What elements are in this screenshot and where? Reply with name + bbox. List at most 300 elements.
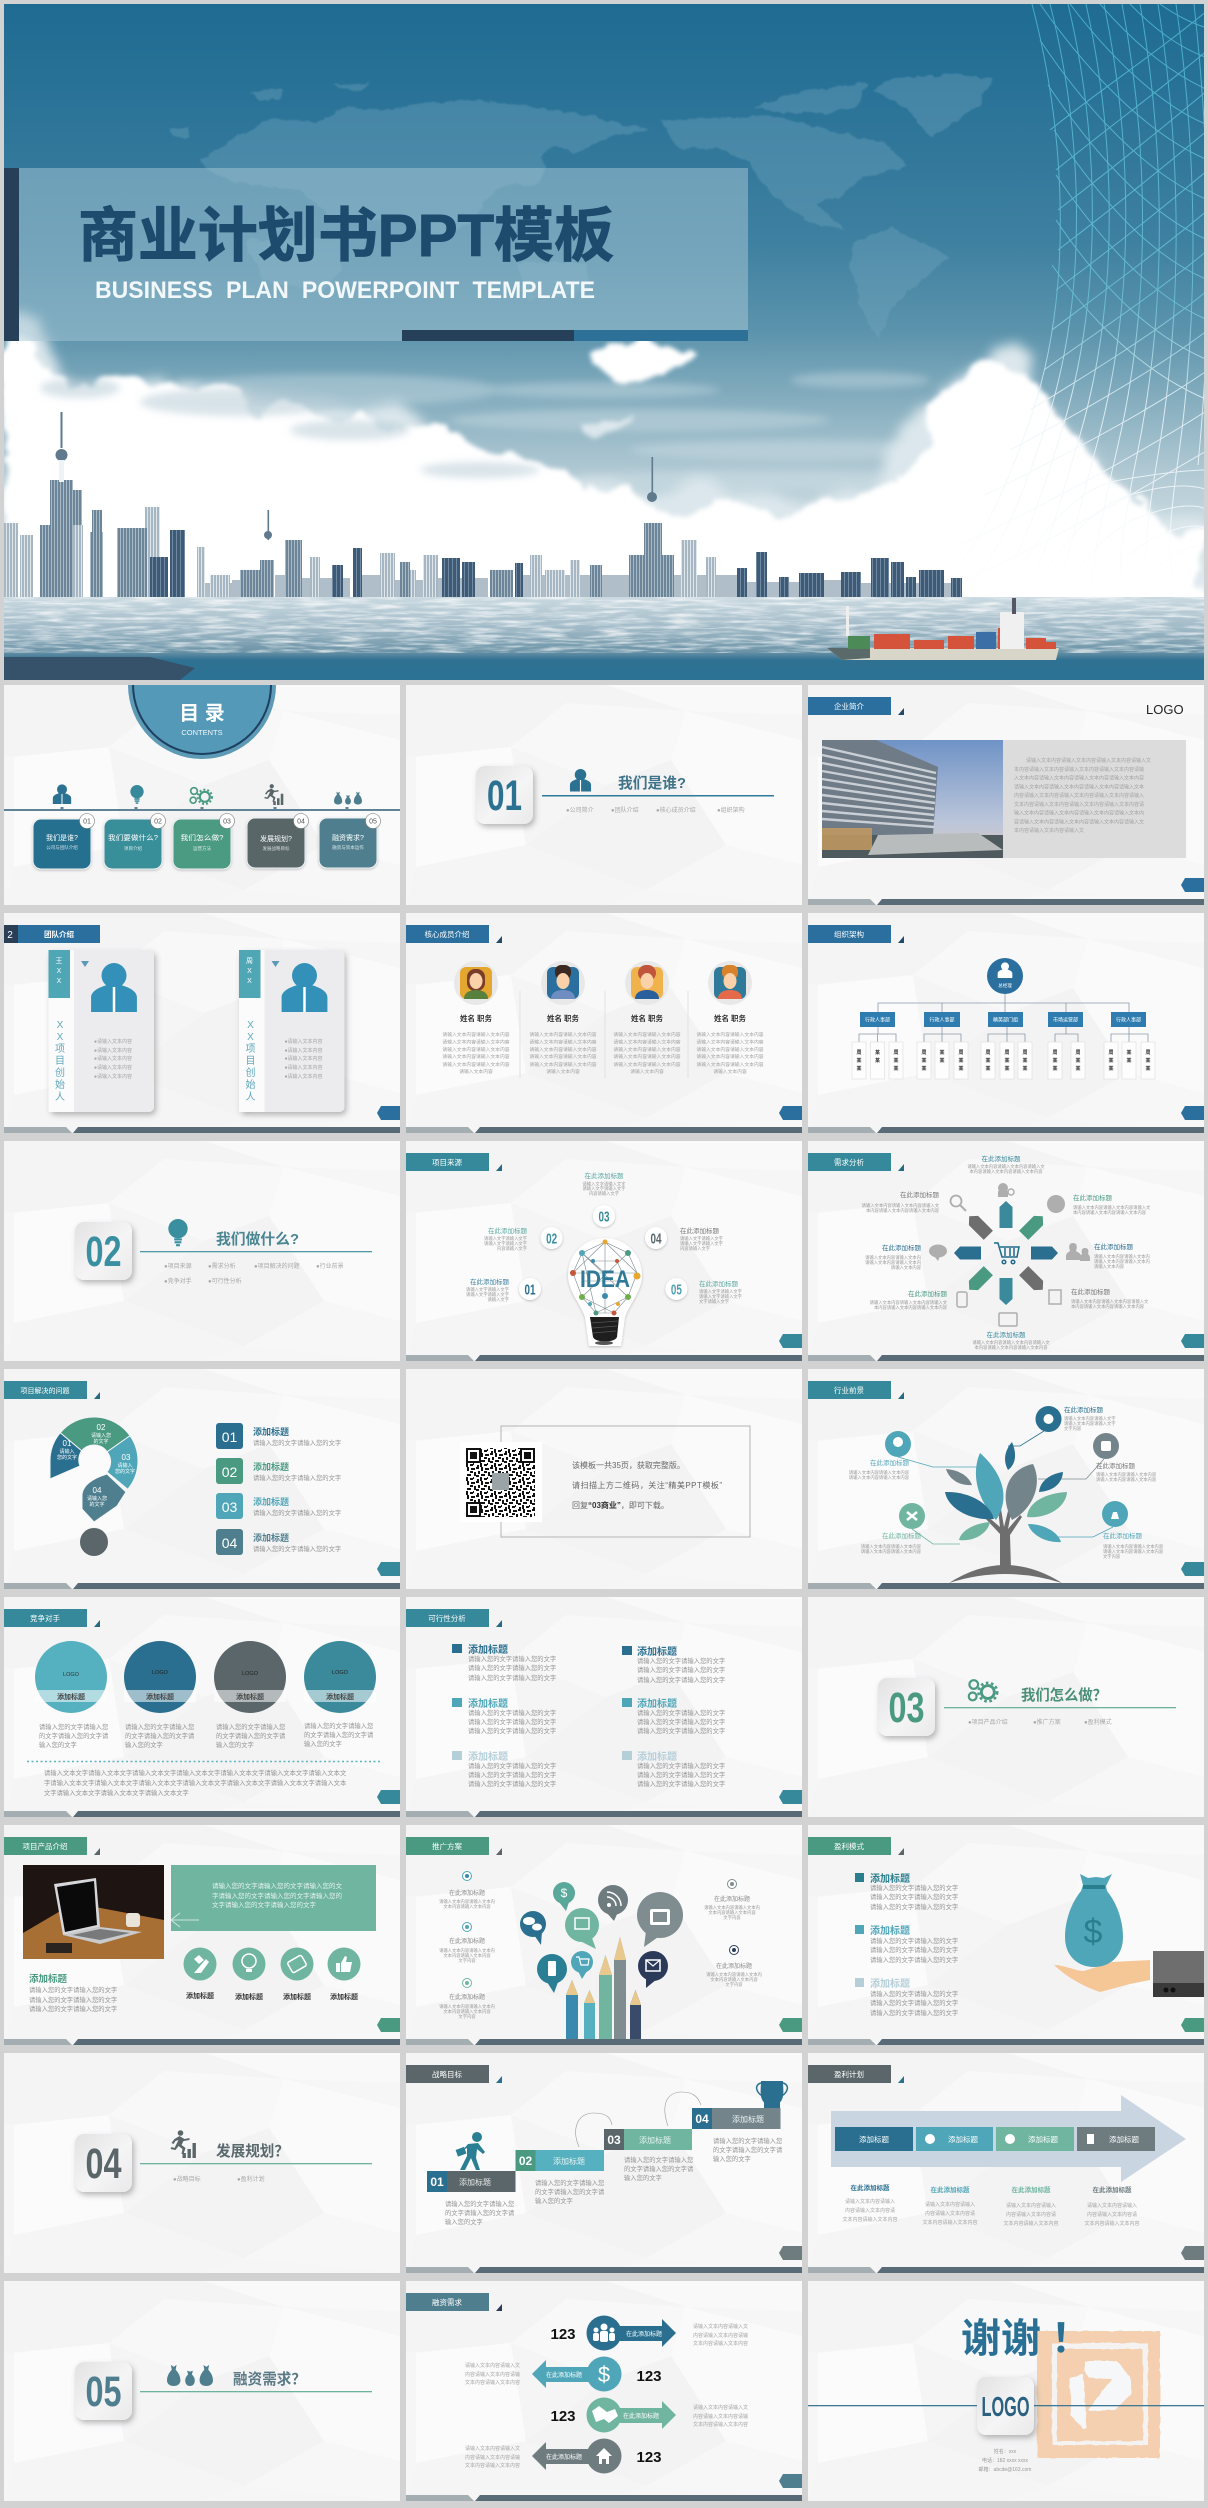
staff names: 周 xyxy=(1004,1050,1010,1056)
competitor 2: 输入您的文字 xyxy=(125,1740,163,1749)
header chip xyxy=(4,1381,100,1399)
label upper right: 文字内容 xyxy=(1064,1425,1082,1432)
department labels: 精英部门组 xyxy=(993,1016,1018,1024)
competitor 2: 请输入您的文字请输入您 xyxy=(125,1722,194,1731)
left item 1: 请输入文本内容请输入文本内 xyxy=(439,1898,495,1905)
label right: 请输入文本内容请输入文本内 xyxy=(1094,1258,1150,1265)
right item 1: 文字内容 xyxy=(723,1914,741,1921)
chart labels: 请输入 xyxy=(59,1448,75,1455)
timeline xyxy=(4,807,400,811)
text block 02: 内容请输入文字 xyxy=(497,1245,527,1252)
column 4: 请输入文本内容请输入 xyxy=(1087,2202,1137,2209)
dark foreground water xyxy=(4,657,195,680)
row 1: 123 xyxy=(550,2326,576,2343)
divider xyxy=(140,2163,372,2164)
header chip: 企业简介 xyxy=(834,701,864,711)
big arrow xyxy=(831,2095,1186,2182)
right item 2: 文字内容 xyxy=(725,1981,743,1988)
item right 2: 请输入您的文字请输入您的文字 xyxy=(637,1726,725,1735)
chart labels: 您的文字 xyxy=(115,1468,135,1475)
item right 3: 请输入您的文字请输入您的文字 xyxy=(637,1761,725,1770)
staff names: 周 xyxy=(985,1050,991,1056)
team card 1: 始 xyxy=(55,1078,65,1091)
column 1 xyxy=(842,2183,898,2223)
text block 05 xyxy=(699,1279,742,1305)
divider xyxy=(944,1707,1176,1708)
summary paragraph: 文字请输入文本文字请输入文本文字请输入文本文字 xyxy=(44,1788,189,1797)
bullets: ●组织架构 xyxy=(717,806,745,814)
skyline xyxy=(4,412,962,597)
clouds white mass xyxy=(4,338,1204,620)
satellite icons xyxy=(929,1183,1090,1326)
text block 04: 请输入文字请输入文字 xyxy=(680,1240,723,1247)
card 02: 我们要做什么? xyxy=(108,833,158,842)
row 4: 请输入文本内容请输入文 xyxy=(465,2445,520,2452)
description panel: 内容请输入文本内容请输入文本内容请输入文本内容请输入 xyxy=(1014,792,1144,799)
column 1: 请输入文本内容请输入 xyxy=(845,2198,895,2205)
left text block: 请输入您的文字请输入您的文字 xyxy=(29,1995,117,2004)
staff names: 某 xyxy=(893,1057,899,1064)
green callout panel: 文字请输入您的文字请输入您的文字 xyxy=(212,1900,316,1909)
competitor 4: 添加标题 xyxy=(326,1692,354,1701)
question mark chart xyxy=(50,1417,138,1556)
text block 03: 内容请输入文字 xyxy=(589,1190,619,1197)
panel: industry outlook xyxy=(808,1369,1204,1589)
number tile: 02 xyxy=(86,1228,122,1276)
label left: 在此添加标题 xyxy=(870,1458,910,1467)
chart labels: 您的文字 xyxy=(57,1454,77,1461)
staff names: 周 xyxy=(1022,1050,1028,1056)
item right 1: 请输入您的文字请输入您的文字 xyxy=(637,1665,725,1674)
heading: 融资需求？ xyxy=(233,2370,306,2388)
photo: building xyxy=(822,740,1003,858)
number tile: 05 xyxy=(86,2368,122,2416)
page tab xyxy=(779,2246,802,2260)
member 2: 请输入文本内容请输入文本内容 xyxy=(529,1046,597,1053)
team card 2 xyxy=(239,950,344,1112)
bullets xyxy=(566,806,745,814)
chart labels: 04 xyxy=(93,1486,102,1495)
team card 2: ●请输入文本内容 xyxy=(284,1038,323,1045)
staff names: 某 xyxy=(875,1049,880,1056)
stage 2 xyxy=(916,2127,993,2151)
right item 1: 请输入文本内容请输入文本内 xyxy=(704,1904,760,1911)
item 3: 请输入您的文字请输入您的文字 xyxy=(870,1998,958,2007)
item 3 xyxy=(855,1977,958,2017)
right item 2 xyxy=(706,1946,762,1988)
header chip xyxy=(406,925,502,943)
team card 1: X xyxy=(57,1032,64,1043)
text block 01: 在此添加标题 xyxy=(470,1277,510,1286)
left item 2: 文本内容请输入文本内容 xyxy=(443,1952,491,1959)
description panel: 请输入文本内容请输入文本内容请输入文本内容请输入文本 xyxy=(1014,784,1144,790)
bullets xyxy=(164,1262,344,1285)
page tab xyxy=(377,1562,400,1576)
text block 02: 在此添加标题 xyxy=(488,1226,528,1235)
member 2: 请输入文本内容请输入文本内容 xyxy=(529,1031,597,1038)
step text 3: 输入您的文字 xyxy=(624,2173,662,2182)
header chip: 盈利模式 xyxy=(834,1841,864,1851)
item 2: 请输入您的文字请输入您的文字 xyxy=(870,1945,958,1954)
competitor 3: LOGO xyxy=(242,1671,259,1677)
row 3: 在此添加标题 xyxy=(623,2412,659,2420)
list item 01: 01 xyxy=(222,1429,237,1445)
item 1 xyxy=(855,1872,958,1911)
card 01: 01 xyxy=(83,818,91,826)
header chip xyxy=(406,1609,502,1627)
competitor 1 xyxy=(35,1641,109,1749)
label left: 在此添加标题 xyxy=(882,1243,922,1252)
staff names: 某 xyxy=(1004,1057,1010,1064)
header chip xyxy=(808,1153,904,1171)
stage 3 xyxy=(996,2127,1074,2151)
item 2 xyxy=(855,1924,958,1964)
list item 02: 添加标题 xyxy=(253,1461,289,1472)
icon: bulb xyxy=(168,1219,188,1246)
team card 1: 人 xyxy=(55,1091,65,1103)
item 3: 请输入您的文字请输入您的文字 xyxy=(870,2008,958,2017)
label right xyxy=(1096,1461,1157,1483)
header chip: 核心成员介绍 xyxy=(424,929,470,939)
page tab xyxy=(779,2018,802,2032)
panel: problems solved xyxy=(4,1369,400,1589)
label lower right: 本内容请输入文本内容请输入文本内容 xyxy=(1071,1303,1145,1310)
label bottom: 在此添加标题 xyxy=(986,1330,1026,1339)
step text 3 xyxy=(624,2155,694,2182)
item left 3: 添加标题 xyxy=(468,1750,508,1763)
hero banner xyxy=(4,4,1208,680)
panel: project source xyxy=(406,1141,802,1361)
member 3: 请输入文本内容请输入文本内容 xyxy=(613,1038,681,1046)
text block 01: 请输入文字 xyxy=(488,1296,509,1303)
staff names: 某 xyxy=(856,1057,862,1064)
card 03 xyxy=(173,814,234,869)
stage 1 xyxy=(835,2127,913,2151)
summary paragraph: 请输入文本文字请输入文本文字请输入文本文字请输入文本文字请输入文本文字请输入文本文字请输入文本文 xyxy=(44,1768,347,1777)
staff names: 某 xyxy=(1108,1057,1114,1064)
card 04: 发展战略目标 xyxy=(262,845,290,852)
header chip: 2 xyxy=(7,930,13,941)
panel: company intro xyxy=(808,685,1204,905)
text block 05: 请输入文字请输入文字 xyxy=(699,1293,742,1300)
list item 03: 请输入您的文字请输入您的文字 xyxy=(253,1508,341,1517)
text block 02: 请输入文字请输入文字 xyxy=(484,1235,527,1242)
number 03: 03 xyxy=(598,1208,610,1226)
staff names: 某 xyxy=(1004,1065,1010,1072)
label lower right xyxy=(1103,1531,1164,1560)
label left xyxy=(865,1243,922,1271)
step text 1: 输入您的文字 xyxy=(445,2217,483,2226)
bullets: ●竞争对手 xyxy=(164,1277,192,1285)
step text 1 xyxy=(445,2199,515,2226)
item right 1 xyxy=(622,1645,725,1684)
stage 1: 添加标题 xyxy=(859,2134,889,2144)
icon labels: 添加标题 xyxy=(330,1992,358,2001)
item left 2: 请输入您的文字请输入您的文字 xyxy=(468,1708,556,1717)
team card 1: ●请输入文本内容 xyxy=(94,1064,132,1071)
icon labels: 添加标题 xyxy=(235,1992,263,2001)
step 01: 01 xyxy=(430,2175,444,2189)
item 3: 请输入您的文字请输入您的文字 xyxy=(870,1989,958,1998)
bullets: ●项目产品介绍 xyxy=(968,1718,1008,1726)
staff names: 周 xyxy=(1108,1050,1114,1056)
panel: section 01 xyxy=(406,685,802,905)
stage 4 xyxy=(1077,2127,1155,2151)
label left: 请输入文本内容请输入文本内容 xyxy=(849,1469,910,1476)
label right xyxy=(1094,1242,1150,1270)
header chip xyxy=(808,2065,904,2083)
text block 02 xyxy=(484,1226,528,1252)
title band xyxy=(4,168,748,341)
header chip xyxy=(406,2293,502,2311)
row 4: 文本内容请输入文本内容 xyxy=(465,2462,520,2469)
text block 03: 请输入文字请输入文字 xyxy=(583,1180,625,1188)
page tab xyxy=(1181,2246,1204,2260)
step 01 xyxy=(427,2171,516,2192)
bullets: ●可行性分析 xyxy=(208,1277,242,1285)
number tile xyxy=(75,2362,132,2420)
list item 04 xyxy=(216,1529,341,1555)
label lower left: 在此添加标题 xyxy=(882,1531,922,1540)
page tab xyxy=(1181,1106,1204,1120)
speech bubbles: $ xyxy=(561,1886,568,1900)
number tile xyxy=(75,1222,132,1280)
label top: 在此添加标题 xyxy=(982,1154,1021,1163)
team card 1: ●请输入文本内容 xyxy=(94,1055,132,1062)
icon: gears xyxy=(190,788,212,804)
chart labels: 02 xyxy=(97,1423,106,1432)
CEO node: 总经理 xyxy=(998,982,1012,988)
departments xyxy=(860,1012,1146,1027)
step text 3: 请输入您的文字请输入您 xyxy=(624,2155,693,2164)
text block 04 xyxy=(680,1226,723,1252)
item 2: 添加标题 xyxy=(870,1924,910,1937)
staff names: 周 xyxy=(958,1050,964,1056)
row 2: 在此添加标题 xyxy=(546,2371,582,2379)
column 4 xyxy=(1084,2185,1140,2227)
member 4: 请输入文本内容请输入文本内容 xyxy=(696,1053,764,1060)
summary paragraph: 字请输入文本文字请输入文本文字请输入文本文字请输入文本文字请输入文本文字请输入文本文字请输入文本 xyxy=(44,1778,347,1787)
label top xyxy=(967,1154,1045,1175)
row 1: 内容请输入文本内容请输 xyxy=(693,2332,748,2339)
competitor 2 xyxy=(124,1641,196,1749)
column 1: 内容请输入文本内容请 xyxy=(845,2207,895,2214)
team card 1: 创 xyxy=(55,1066,65,1079)
left item 3: 文字内容 xyxy=(458,2013,476,2020)
header chip xyxy=(4,1837,100,1855)
item right 2 xyxy=(622,1697,725,1735)
label upper right: 本内容请输入文本内容请输入文本内容 xyxy=(1073,1209,1147,1216)
frame xyxy=(501,1426,750,1537)
team card 2: 项 xyxy=(246,1043,256,1055)
chart labels xyxy=(57,1423,135,1508)
label lower left: 请输入文本内容请输入文本内容 xyxy=(861,1543,922,1550)
column 3: 内容请输入文本内容请 xyxy=(1006,2211,1056,2218)
item right 1: 添加标题 xyxy=(637,1645,677,1658)
team card 2: ●请输入文本内容 xyxy=(284,1073,323,1080)
icon: trophy xyxy=(757,2081,787,2108)
item left 3 xyxy=(452,1750,556,1788)
competitor 1: LOGO xyxy=(63,1672,80,1678)
chart labels: 请输入您 xyxy=(91,1432,111,1439)
department labels: 行政人事部 xyxy=(929,1016,955,1024)
divider xyxy=(140,1251,372,1252)
item right 2: 添加标题 xyxy=(637,1697,677,1710)
label lower left xyxy=(870,1289,948,1311)
bullets: ●项目解决的问题 xyxy=(254,1262,300,1270)
page tab xyxy=(779,1106,802,1120)
label lower right: 请输入文本内容请输入文本内容 xyxy=(1103,1543,1164,1550)
member 2: 姓名 职务 xyxy=(547,1013,580,1023)
right item 2: 文本内容请输入文本内容 xyxy=(710,1976,758,1983)
item right 3: 请输入您的文字请输入您的文字 xyxy=(637,1770,725,1779)
bullets: ●公司简介 xyxy=(566,806,594,814)
staff names: 某 xyxy=(1075,1065,1081,1072)
member 3: 请输入文本内容请输入文本内容 xyxy=(613,1053,681,1060)
staff names: 某 xyxy=(958,1065,964,1072)
member 4: 请输入文本内容请输入文本内容 xyxy=(696,1038,764,1046)
member 3: 请输入文本内容请输入文本内容 xyxy=(613,1031,681,1038)
page tab xyxy=(377,1790,400,1804)
staff names: 某 xyxy=(1075,1057,1081,1064)
instructions xyxy=(572,1460,722,1510)
heading: 我们是谁? xyxy=(618,774,686,792)
header chip xyxy=(4,1609,100,1627)
team card 1: ●请输入文本内容 xyxy=(94,1073,132,1080)
step 04: 添加标题 xyxy=(732,2114,764,2124)
team card 2: ●请输入文本内容 xyxy=(284,1064,323,1071)
number tile: 03 xyxy=(888,1684,924,1732)
item right 2: 请输入您的文字请输入您的文字 xyxy=(637,1708,725,1717)
team card 2: X xyxy=(247,1020,254,1031)
page tab xyxy=(779,1334,802,1348)
left item 2 xyxy=(439,1922,495,1964)
label upper right: 请输入文本内容请输入文本内容请输入文 xyxy=(1073,1204,1151,1211)
right item 1 xyxy=(704,1880,760,1921)
right item 1: 在此添加标题 xyxy=(714,1895,750,1903)
panel: org chart xyxy=(808,913,1204,1133)
header chip xyxy=(406,1153,502,1171)
idea bulb: IDEA xyxy=(580,1266,630,1293)
heading: 发展规划？ xyxy=(216,2142,289,2160)
instructions: 回复“03商业”，即可下载。 xyxy=(572,1500,669,1510)
left text block: 请输入您的文字请输入您的文字 xyxy=(29,1985,117,1994)
money bag in hand xyxy=(1054,1874,1204,1997)
competitor 2: 的文字请输入您的文字请 xyxy=(125,1731,195,1740)
label top: 本内容请输入文本内容请输入文本内容 xyxy=(969,1168,1043,1175)
left item 3: 请输入文本内容请输入文本内 xyxy=(439,2003,495,2010)
member 1: 请输入文本内容 xyxy=(459,1068,493,1075)
bullets: ●团队介绍 xyxy=(611,806,639,814)
label upper right xyxy=(1064,1405,1116,1432)
competitor 3: 的文字请输入您的文字请 xyxy=(216,1731,286,1740)
column 2: 文本内容请输入文本内容 xyxy=(922,2219,978,2226)
column 1: 文本内容请输入文本内容 xyxy=(842,2216,898,2223)
description panel: 输入文本内容请输入文本内容请输入文本内容请输入文本内 xyxy=(1014,810,1144,816)
stamp watermark xyxy=(1037,2331,1160,2458)
member 2: 请输入文本内容请输入文本内容 xyxy=(529,1061,597,1068)
step text 4: 请输入您的文字请输入您 xyxy=(713,2136,782,2145)
panel: competitors xyxy=(4,1597,400,1817)
staff names: 某 xyxy=(921,1065,927,1072)
label lower right: 请输入文本内容请输入文本内容请输入文 xyxy=(1071,1298,1149,1305)
label left: 请输入文本内容请输入文本内容 xyxy=(849,1474,910,1481)
header chip: 组织架构 xyxy=(834,929,864,939)
org connectors xyxy=(859,993,1148,1042)
bullets: ●推广方案 xyxy=(1033,1718,1061,1726)
item 2: 请输入您的文字请输入您的文字 xyxy=(870,1955,958,1964)
team card 1: X xyxy=(57,1020,64,1031)
step text 2 xyxy=(535,2178,605,2205)
header chip: 战略目标 xyxy=(432,2069,462,2079)
bullets: ●战略目标 xyxy=(173,2175,201,2183)
chart labels: 01 xyxy=(63,1439,72,1448)
page tab xyxy=(779,2474,802,2488)
divider xyxy=(140,2391,372,2392)
card 04 xyxy=(247,814,308,868)
panel: feasibility xyxy=(406,1597,802,1817)
card 05: 融资需求? xyxy=(332,833,364,842)
team card 2: 创 xyxy=(246,1066,256,1079)
team card 1: ●请输入文本内容 xyxy=(94,1047,132,1054)
label upper left: 请输入文本内容请输入文本内容请输入文 xyxy=(862,1202,940,1209)
bullets: ●需求分析 xyxy=(208,1262,236,1270)
bullets: ●盈利计划 xyxy=(237,2175,265,2183)
icon labels: 添加标题 xyxy=(186,1991,214,2000)
number 05: 05 xyxy=(671,1282,682,1298)
icon labels: 添加标题 xyxy=(283,1992,311,2001)
label left: 请输入文本内容请输入文本内 xyxy=(865,1254,921,1261)
bullets: ●项目来源 xyxy=(164,1262,192,1270)
row 3: 文本内容请输入文本内容 xyxy=(693,2421,748,2428)
header chip xyxy=(406,2065,502,2083)
row 1 xyxy=(550,2316,748,2350)
competitor 1: 的文字请输入您的文字请 xyxy=(39,1731,109,1740)
staff names: 某 xyxy=(1145,1057,1151,1064)
step 04: 04 xyxy=(695,2112,709,2126)
icon: person xyxy=(570,769,591,792)
left item 2: 在此添加标题 xyxy=(449,1937,485,1945)
text block 01: 请输入文字请输入文字 xyxy=(466,1286,509,1293)
green callout panel: 字请输入您的文字请输入您的文字请输入您的 xyxy=(212,1891,342,1900)
staff names: 某 xyxy=(893,1065,899,1072)
staff names: 周 xyxy=(921,1050,927,1056)
text block 05: 请输入文字请输入文字 xyxy=(699,1288,742,1295)
label lower left: 请输入文本内容请输入文本内容请输入文 xyxy=(870,1299,948,1306)
thanks heading: 谢谢 xyxy=(961,2317,1041,2361)
step text 1: 的文字请输入您的文字请 xyxy=(445,2208,515,2217)
number tile: 04 xyxy=(86,2140,122,2188)
radial arrows xyxy=(954,1201,1058,1305)
right item 2: 在此添加标题 xyxy=(716,1962,752,1970)
description panel: 本内容请输入文本内容请输入文 xyxy=(1014,827,1084,834)
team card 1 xyxy=(48,950,154,1112)
step text 4 xyxy=(713,2136,783,2163)
team card 2: 周 xyxy=(246,957,253,965)
step 02 xyxy=(516,2150,604,2171)
list item 03: 03 xyxy=(222,1499,237,1515)
team card 2: X xyxy=(247,1032,254,1043)
left item 3: 在此添加标题 xyxy=(449,1993,485,2001)
contact text: 姓名：xxx xyxy=(994,2448,1017,2455)
team card 1: 目 xyxy=(55,1056,65,1067)
header chip: 需求分析 xyxy=(834,1157,864,1167)
item right 2: 请输入您的文字请输入您的文字 xyxy=(637,1717,725,1726)
row 4: 123 xyxy=(636,2449,662,2466)
label lower left: 在此添加标题 xyxy=(908,1289,948,1298)
thanks heading xyxy=(961,2317,1091,2361)
dividers xyxy=(520,991,688,1078)
